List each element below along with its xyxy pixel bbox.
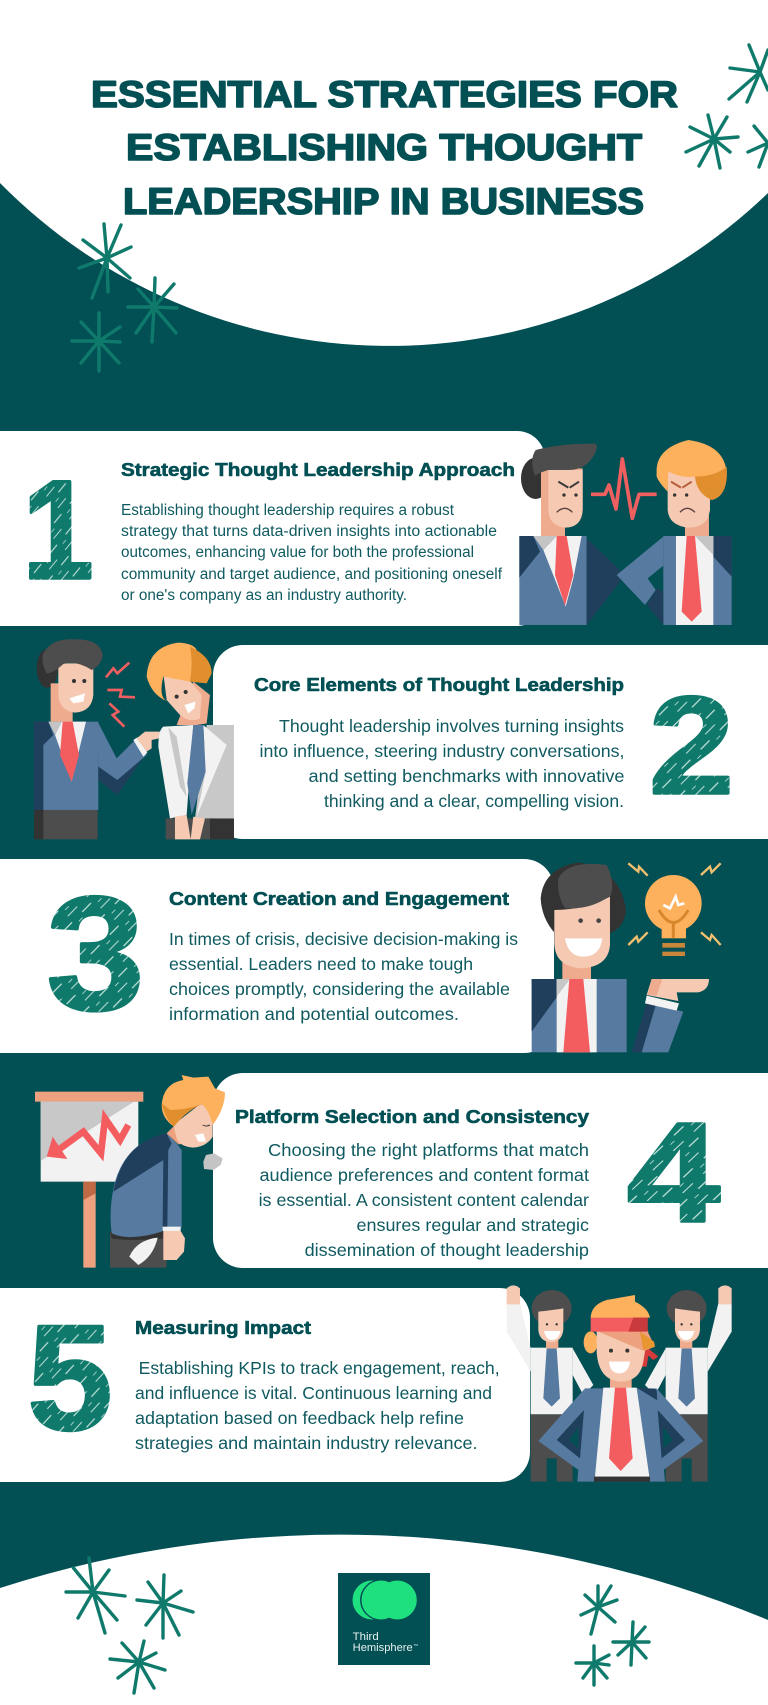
footer white arc <box>0 1535 768 1705</box>
body text 1: Establishing thought leadership requires a robust <box>121 502 455 519</box>
logo: Third Hemisphere: Third <box>353 1631 379 1643</box>
illustration: two angry businessmen <box>519 440 732 625</box>
panel: strategy 1 <box>0 431 732 626</box>
icon: stars top left <box>72 224 177 371</box>
illustration: tired man with falling chart <box>35 1075 225 1268</box>
numeral 4: 4 <box>627 1093 720 1251</box>
body text 2: and setting benchmarks with innovative <box>308 766 624 786</box>
icon: stars bottom left <box>66 1558 193 1693</box>
body text 2: into influence, steering industry conversations, <box>260 741 624 761</box>
body text 4: ensures regular and strategic <box>356 1215 589 1235</box>
body text 5: Establishing KPIs to track engagement, reach, <box>139 1358 500 1378</box>
body text 1: community and target audience, and positioning oneself <box>121 566 503 583</box>
body text 1: outcomes, enhancing value for both the professional <box>121 544 474 561</box>
title: LEADERSHIP IN BUSINESS <box>123 181 644 222</box>
body text 5: adaptation based on feedback help refine <box>135 1408 464 1428</box>
body text 5 <box>135 1358 500 1453</box>
logo: Third Hemisphere <box>338 1573 430 1665</box>
body text 5: strategies and maintain industry relevance. <box>135 1433 478 1453</box>
body text 1: or one's company as an industry authority. <box>121 587 407 604</box>
panel: strategy 5 <box>0 1285 732 1482</box>
body text 2 <box>260 716 624 811</box>
center leader <box>538 1295 703 1482</box>
body text 2: thinking and a clear, compelling vision. <box>324 791 624 811</box>
icon: stars bottom right <box>576 1586 649 1685</box>
title: ESTABLISHING THOUGHT <box>126 127 642 168</box>
icon: stars top right <box>686 45 768 168</box>
body text 3: In times of crisis, decisive decision-making is <box>169 929 518 949</box>
body text 4: Choosing the right platforms that match <box>268 1140 589 1160</box>
logo: Third Hemisphere: TM <box>414 1643 418 1647</box>
heading 3: Content Creation and Engagement <box>169 889 509 909</box>
heading 2: Core Elements of Thought Leadership <box>254 675 624 695</box>
heading 4: Platform Selection and Consistency <box>235 1107 589 1127</box>
numeral 1: 1 <box>23 452 93 608</box>
numeral 3: 3 <box>47 864 144 1043</box>
illustration: businessman with idea bulb <box>532 862 721 1052</box>
left teammate <box>507 1285 593 1482</box>
body text 4: is essential. A consistent content calendar <box>259 1190 589 1210</box>
body text 4: dissemination of thought leadership <box>305 1240 589 1260</box>
title <box>91 74 678 222</box>
body text 3: information and potential outcomes. <box>169 1004 459 1024</box>
body text 4: audience preferences and content format <box>260 1165 589 1185</box>
panel: strategy 4 <box>35 1073 768 1268</box>
body text 1: strategy that turns data-driven insights into actionable <box>121 523 497 540</box>
logo: Third Hemisphere: Hemisphere <box>353 1642 413 1654</box>
body text 3 <box>169 929 518 1024</box>
panel: strategy 3 <box>0 859 721 1053</box>
heading 5: Measuring Impact <box>135 1318 311 1338</box>
numeral 2: 2 <box>649 668 734 822</box>
body text 3: essential. Leaders need to make tough <box>169 954 473 974</box>
title: ESSENTIAL STRATEGIES FOR <box>91 74 678 115</box>
body text 2: Thought leadership involves turning insights <box>279 716 624 736</box>
right teammate <box>645 1285 732 1482</box>
body text 1 <box>121 502 503 604</box>
numeral 5: 5 <box>28 1294 112 1461</box>
illustration: celebrating team <box>507 1285 732 1482</box>
body text 5: and influence is vital. Continuous learning and <box>135 1383 492 1403</box>
heading 1: Strategic Thought Leadership Approach <box>121 460 515 480</box>
body text 3: choices promptly, considering the available <box>169 979 510 999</box>
body text 4 <box>259 1140 589 1260</box>
panel: strategy 2 <box>34 639 768 839</box>
header white arc <box>0 0 768 346</box>
illustration: arguing coworkers <box>34 639 234 839</box>
